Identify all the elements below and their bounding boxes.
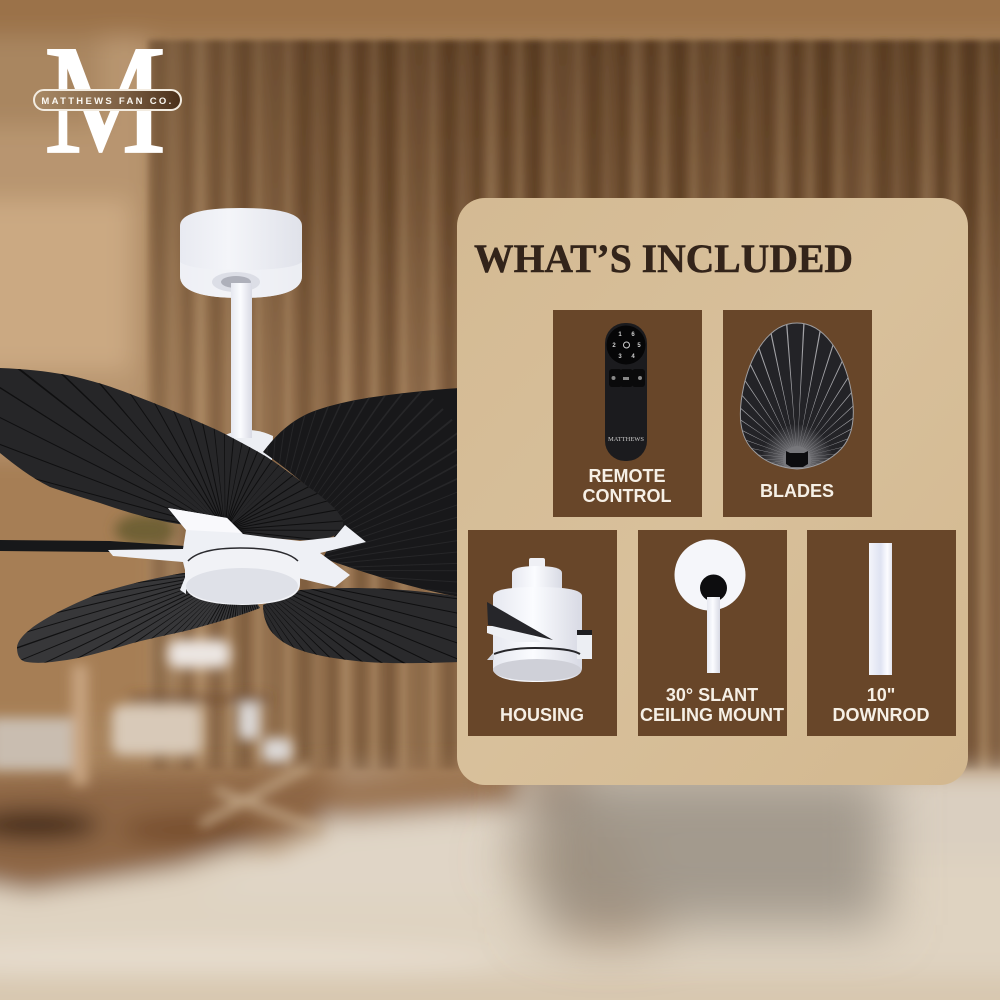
card: 10" downrod bbox=[807, 530, 956, 736]
background: blurred floor and rug bbox=[0, 765, 1000, 1000]
label: BLADES bbox=[760, 481, 834, 501]
label: CEILING MOUNT bbox=[640, 705, 784, 725]
label: DOWNROD bbox=[832, 705, 930, 725]
icon: remote: 1 bbox=[618, 332, 622, 338]
logo: Matthews Fan Co.: MATTHEWS FAN CO. bbox=[41, 96, 174, 107]
icon: remote: 5 bbox=[637, 343, 641, 349]
icon: remote: 6 bbox=[631, 332, 635, 338]
card: housing bbox=[468, 530, 617, 736]
logo: Matthews Fan Co.: M bbox=[44, 13, 166, 186]
fan blade brackets bbox=[108, 508, 366, 590]
lower left blade bbox=[17, 573, 260, 663]
upper left blade bbox=[0, 368, 343, 540]
fan canopy bbox=[180, 208, 302, 298]
heading: WHAT’S INCLUDED bbox=[474, 236, 853, 281]
icon: remote bbox=[605, 323, 647, 461]
icon: remote: 2 bbox=[612, 343, 616, 349]
far left thin blade bbox=[0, 540, 185, 552]
card: 30° slant ceiling mount bbox=[638, 530, 787, 736]
fan collar behind blades bbox=[223, 430, 273, 460]
icon: mount bbox=[674, 540, 746, 673]
icon: remote: 3 bbox=[618, 354, 622, 360]
illustration: ceiling fan bbox=[0, 208, 465, 700]
background: shadow beneath the panel bbox=[500, 770, 885, 937]
label: 10" bbox=[867, 685, 895, 705]
background: wood slats bbox=[148, 40, 1000, 770]
icon: remote: 4 bbox=[631, 354, 635, 360]
card: blades bbox=[723, 310, 872, 528]
lower right blade bbox=[263, 588, 457, 664]
panel: what's included bbox=[457, 198, 968, 785]
card: remote control bbox=[553, 310, 702, 517]
label: REMOTE bbox=[588, 466, 666, 486]
icon: downrod bbox=[869, 543, 892, 675]
icon: housing bbox=[487, 558, 592, 682]
fan motor housing bbox=[180, 548, 300, 605]
background: blurred chair and furniture bbox=[0, 514, 320, 830]
icon: blade bbox=[740, 322, 854, 470]
label: 30° SLANT bbox=[666, 685, 758, 705]
fan downrod bbox=[231, 283, 252, 438]
label: HOUSING bbox=[500, 705, 584, 725]
label: CONTROL bbox=[582, 486, 672, 506]
icon: remote: MATTHEWS bbox=[608, 436, 644, 443]
upper right blade bbox=[263, 388, 457, 596]
